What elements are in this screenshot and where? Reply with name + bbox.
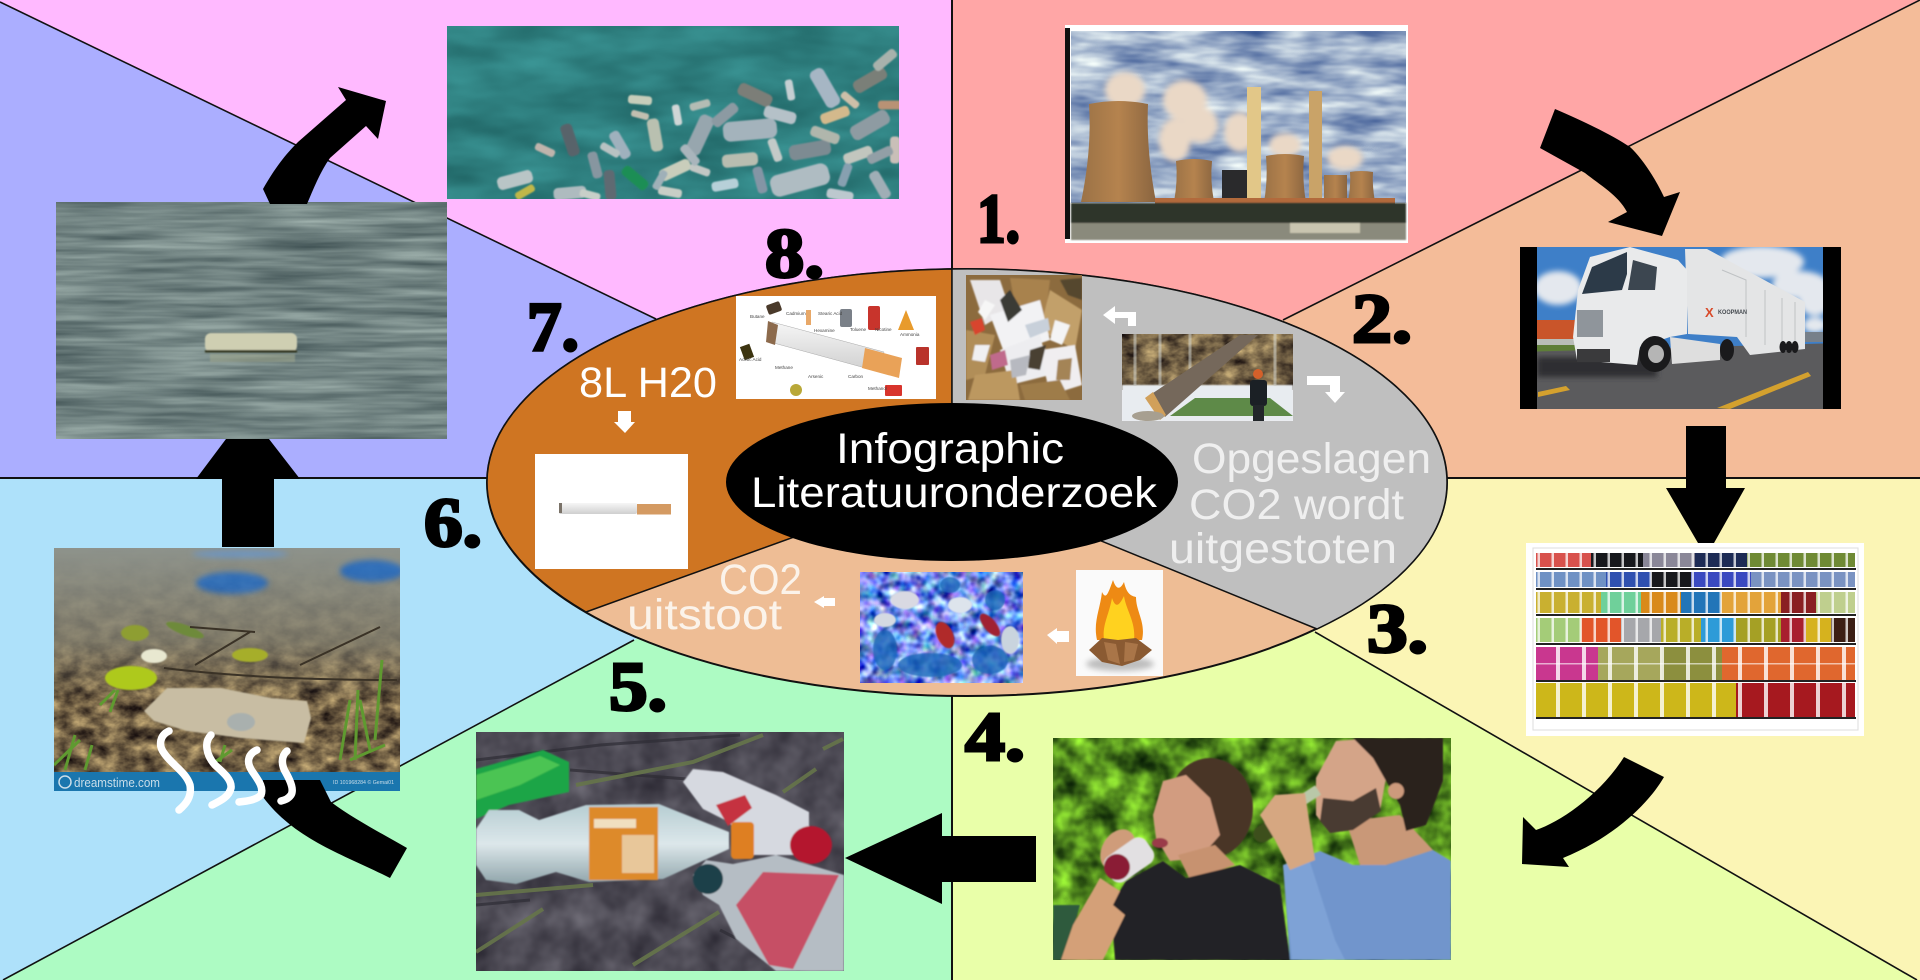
photo: discarded bottles on pavement bbox=[476, 732, 844, 971]
shelf row 1 bbox=[1536, 553, 1855, 567]
ellipse base: peach bbox=[487, 269, 1447, 696]
watermark id: ID 101968284 © Gemai01 bbox=[333, 779, 394, 786]
sector: light blue 6 bbox=[0, 478, 952, 980]
shelf row 6 bbox=[1536, 683, 1855, 717]
title line 2: Literatuuronderzoek bbox=[751, 469, 1158, 517]
chemical labels: Nicotine bbox=[875, 327, 892, 332]
sector: lime 4 bbox=[952, 478, 1917, 980]
uitstoot: uitstoot bbox=[627, 591, 782, 639]
arrow: step 7 to 8 bbox=[263, 87, 386, 204]
small arrow: paper pile return bbox=[1103, 306, 1136, 326]
arrow: step 6 to 7 bbox=[196, 439, 300, 547]
number 5: 5. bbox=[609, 649, 667, 726]
title text bbox=[751, 425, 1158, 517]
photo: truck bbox=[1520, 247, 1841, 409]
step numbers bbox=[424, 181, 1428, 776]
central ellipse bbox=[487, 269, 1447, 696]
center oval bbox=[726, 403, 1178, 561]
text: CO2 uitstoot bbox=[627, 556, 802, 639]
cigarette bbox=[766, 321, 902, 378]
chemical icons bbox=[740, 301, 929, 396]
photo: bottle on water bbox=[56, 202, 447, 439]
title line 1: Infographic bbox=[836, 425, 1064, 473]
chemical labels: Arsenic bbox=[808, 374, 824, 379]
photo: cigarette on white bbox=[535, 454, 688, 569]
chemical labels: Methane bbox=[775, 365, 793, 370]
photo: drinks shelf bbox=[1526, 543, 1864, 736]
arrow: step 4 to 5 bbox=[845, 813, 1036, 904]
sector: lavender 7 bbox=[0, 2, 952, 478]
CO2: CO2 bbox=[719, 556, 802, 604]
sector: yellow 3 bbox=[952, 478, 1920, 980]
small arrow: tree to CO2 bbox=[1307, 376, 1345, 403]
small arrow: plastic to CO2 bbox=[814, 596, 835, 608]
photo: paper and cardboard pile bbox=[966, 275, 1082, 400]
number 3: 3. bbox=[1367, 591, 1428, 668]
number 4: 4. bbox=[965, 699, 1025, 776]
chemical labels: Carbon bbox=[848, 374, 864, 379]
sector: peach 2 bbox=[952, 0, 1920, 485]
sector: mint 5 bbox=[3, 478, 952, 980]
chemical labels: Acetic Acid bbox=[739, 357, 762, 362]
chemical labels: Toluene bbox=[850, 327, 867, 332]
shelf row 5 bbox=[1536, 647, 1855, 680]
text: stored CO2 released bbox=[1169, 435, 1431, 573]
chemical labels bbox=[739, 311, 920, 391]
arrow: step 1 to 2 bbox=[1540, 109, 1680, 236]
icon: campfire bbox=[1076, 570, 1163, 676]
number 7: 7. bbox=[527, 289, 579, 366]
number 2: 2. bbox=[1352, 281, 1412, 358]
chemical labels: Ammonia bbox=[900, 332, 920, 337]
photo: cigarette chemicals diagram bbox=[736, 296, 936, 399]
number 8: 8. bbox=[765, 216, 824, 293]
ellipse segment: orange bbox=[487, 269, 952, 612]
arrow: step 2 to 3 bbox=[1666, 426, 1745, 543]
chemical labels: Butane bbox=[750, 314, 765, 319]
number 6: 6. bbox=[424, 485, 482, 562]
photo: felled tree bbox=[1122, 334, 1293, 421]
line 3: uitgestoten bbox=[1169, 525, 1397, 573]
watermark: dreamstime.com bbox=[74, 775, 160, 790]
photo: couple drinking bbox=[1053, 738, 1451, 960]
small arrow: 8L H20 down bbox=[614, 411, 635, 433]
chemical labels: Methanol bbox=[868, 386, 887, 391]
sector: pink 8 bbox=[0, 0, 952, 478]
ellipse segment: gray bbox=[952, 269, 1447, 629]
line 1: Opgeslagen bbox=[1192, 435, 1431, 483]
shelf row 3 bbox=[1536, 592, 1855, 613]
photo: plastic bottles in sea bbox=[447, 26, 899, 199]
heat squiggles bbox=[161, 731, 292, 810]
photo: bottle on muddy shore bbox=[54, 548, 400, 791]
arrow: step 5 to 6 bbox=[263, 780, 407, 878]
sector: red 1 bbox=[952, 0, 1920, 485]
arrow: step 3 to 4 bbox=[1522, 757, 1664, 867]
number 1: 1. bbox=[977, 181, 1020, 258]
chemical labels: Cadmium bbox=[786, 311, 806, 316]
line 2: CO2 wordt bbox=[1189, 481, 1404, 529]
photo: truck: KOOPMAN bbox=[1718, 310, 1747, 316]
shelf row 2 bbox=[1536, 572, 1855, 587]
shelf row 4 bbox=[1536, 618, 1855, 642]
small arrow: fire to plastic bbox=[1047, 628, 1069, 644]
photo: pile of plastic bottles bbox=[860, 572, 1023, 683]
chemical labels: Hexamine bbox=[814, 328, 835, 333]
truck logo text: X bbox=[1705, 305, 1714, 320]
text: 8L H20: 8L H20 bbox=[579, 359, 717, 407]
chemical labels: Stearic Acid bbox=[818, 311, 843, 316]
photo: power plant bbox=[1065, 25, 1408, 243]
